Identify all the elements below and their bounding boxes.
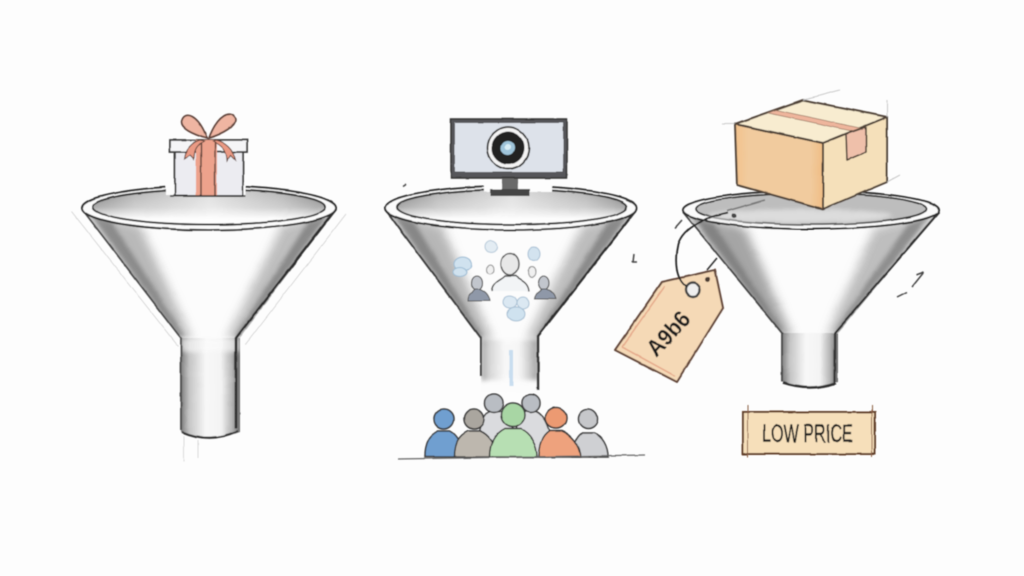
funnel 1 body <box>72 209 346 462</box>
low price sign <box>743 405 875 457</box>
funnel 2 rim <box>385 184 637 230</box>
funnel 3 body <box>683 212 939 391</box>
tag label: A9b6 <box>641 306 695 361</box>
crowd of people below funnel <box>398 394 645 459</box>
funnel 2: webcam and audience <box>385 119 645 459</box>
illustration: three sketched funnels <box>71 89 941 462</box>
motion marks <box>403 184 924 297</box>
front row people <box>425 403 608 457</box>
funnel 3: box, price tag, low price sign <box>403 90 939 457</box>
gift box <box>170 114 247 196</box>
funnel 1 rim <box>82 183 336 230</box>
cardboard box <box>722 90 900 209</box>
back row people <box>476 394 554 457</box>
people and thought bubbles inside funnel <box>453 241 556 321</box>
funnel 2 body <box>385 209 637 392</box>
funnel 1: gift <box>72 114 346 462</box>
drawing layer <box>72 90 939 462</box>
webcam monitor <box>451 119 567 196</box>
packing tape <box>768 110 860 131</box>
funnel 3 rim <box>683 191 939 229</box>
low price label: LOW PRICE <box>762 420 853 448</box>
gift bow <box>182 114 236 161</box>
price tag <box>615 213 736 382</box>
